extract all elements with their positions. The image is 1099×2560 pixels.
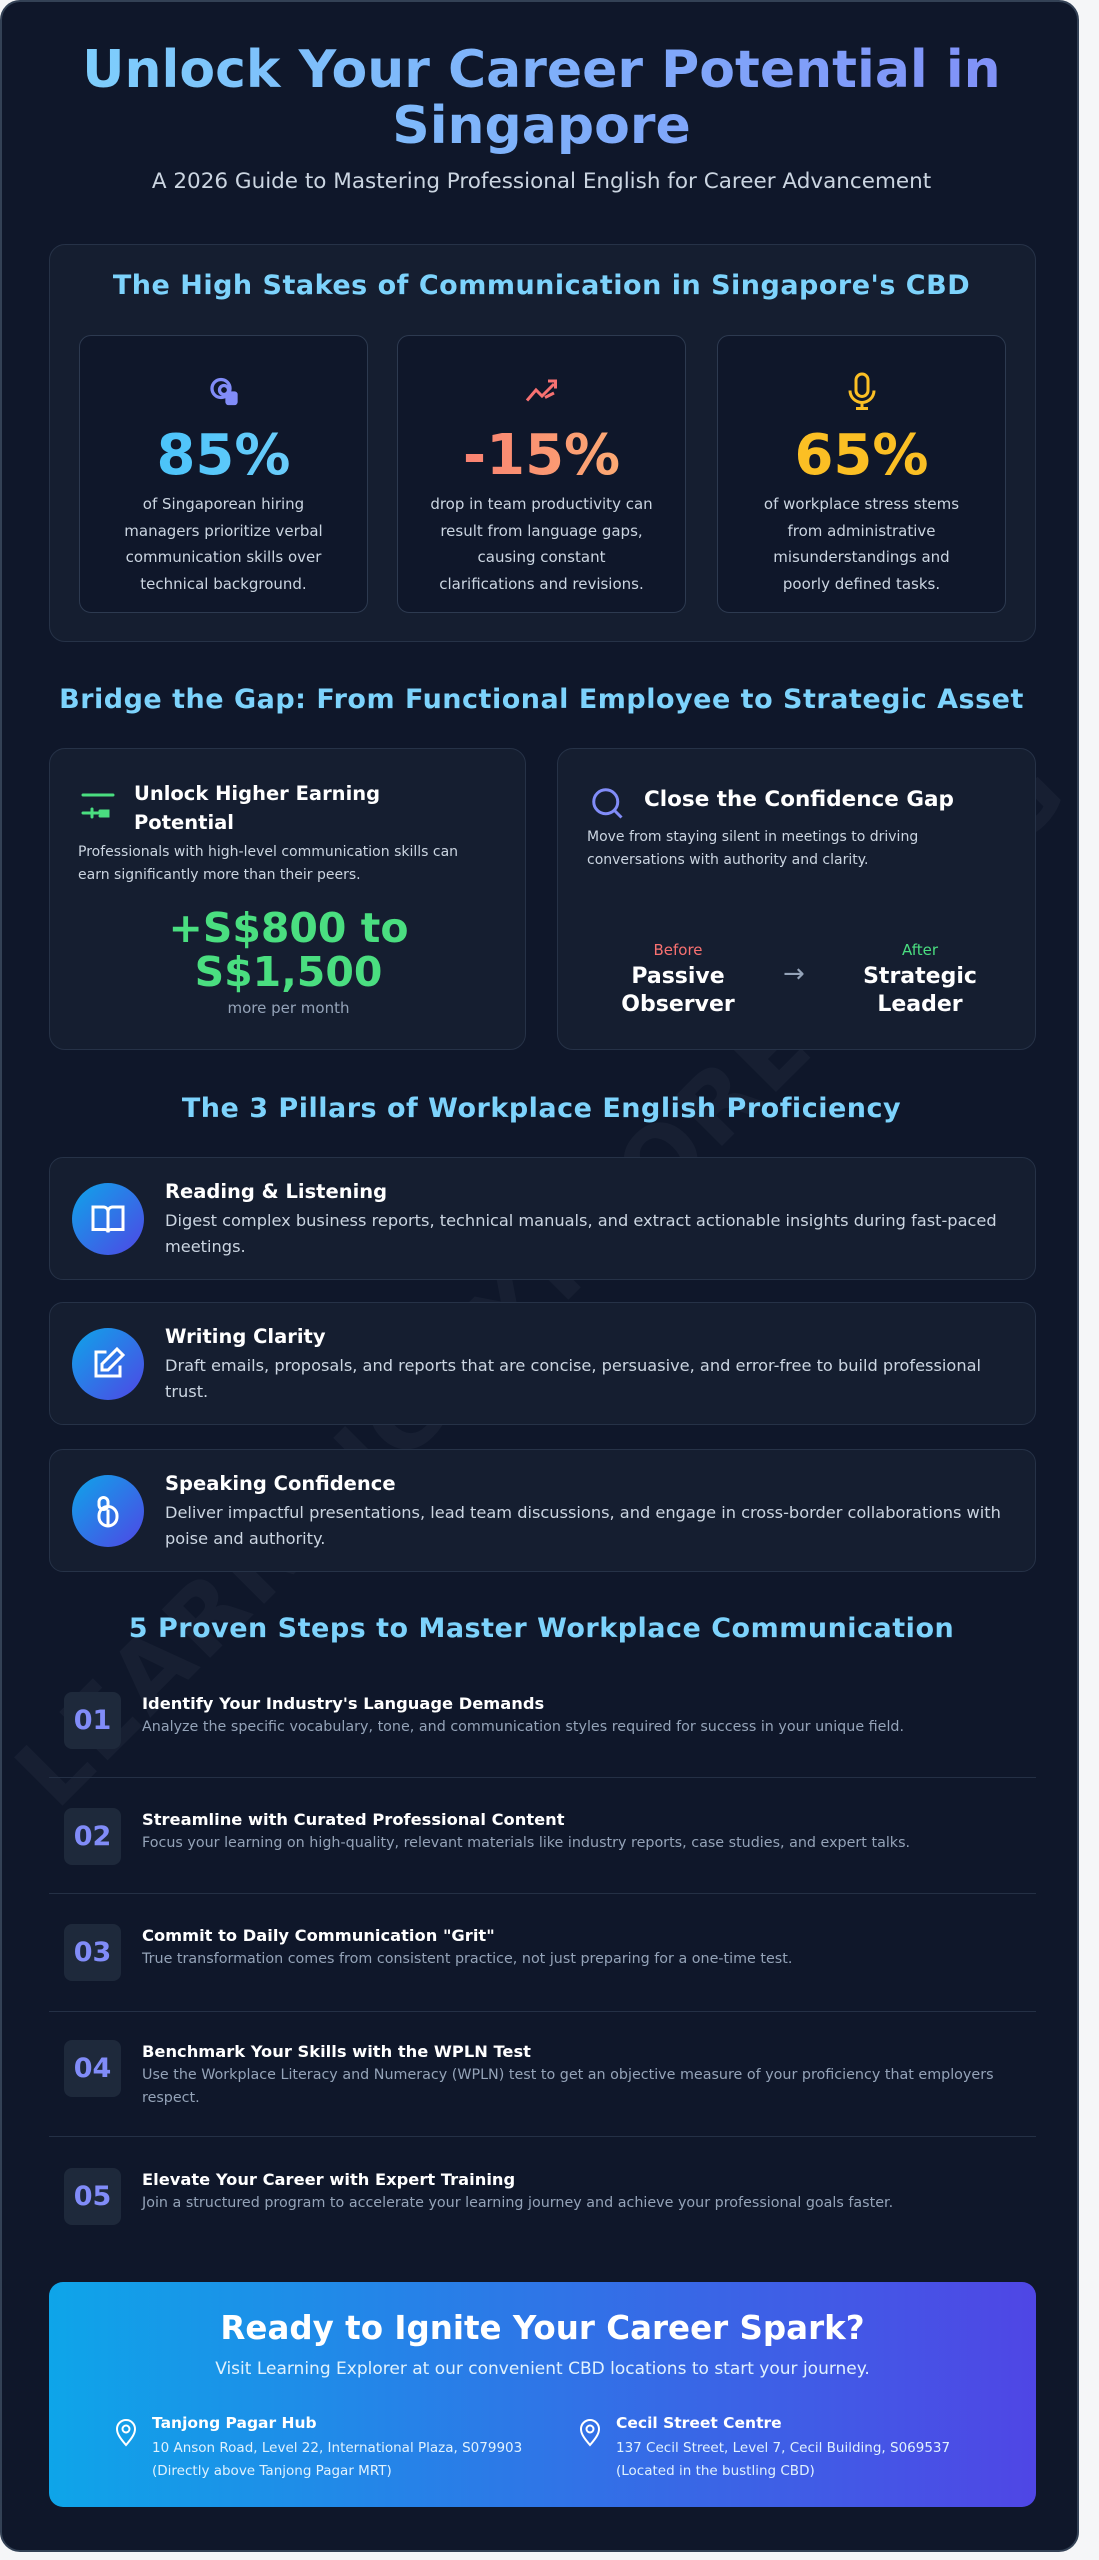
icon: trend bbox=[526, 380, 557, 402]
before: Passive bbox=[631, 964, 725, 989]
stat card -15%: -15% bbox=[463, 423, 620, 488]
pillar: speaking: Speaking Confidence bbox=[165, 1472, 396, 1495]
title bbox=[2, 42, 1081, 154]
step 03: 03 bbox=[74, 1937, 111, 1968]
earning desc: Professionals with high-level communication skills can earn significantly more than their peers. bbox=[78, 844, 458, 883]
before bbox=[621, 941, 735, 1017]
pillar: writing: Draft emails, proposals, and reports that are concise, persuasive, and error-free to build professional trust. bbox=[165, 1356, 981, 1401]
heading: steps: 5 Proven Steps to Master Workplace Communication bbox=[129, 1613, 954, 1644]
panel: earning bbox=[49, 748, 526, 1050]
pillar: reading: Reading & Listening bbox=[165, 1180, 387, 1203]
title: Unlock Your Career Potential in bbox=[82, 40, 1001, 100]
step 01: Identify Your Industry's Language Demands bbox=[142, 1694, 544, 1713]
step 04: 04 bbox=[74, 2053, 111, 2084]
panel: high stakes bbox=[49, 244, 1036, 642]
stat card 65%: of workplace stress stems from administrative misunderstandings and poorly defined tasks. bbox=[764, 495, 959, 592]
step 05 bbox=[64, 2168, 893, 2225]
pillar: speaking bbox=[49, 1449, 1036, 1572]
stat card -15%: result from language gaps, bbox=[440, 522, 643, 540]
step 05: Join a structured program to accelerate your learning journey and achieve your professional goals faster. bbox=[142, 2195, 893, 2211]
earning figure: +S$800 to bbox=[168, 904, 409, 952]
after: Strategic bbox=[863, 964, 977, 989]
location: cecil street: (Located in the bustling CBD) bbox=[616, 2463, 815, 2479]
pillar: reading bbox=[49, 1157, 1036, 1280]
arrow: → bbox=[783, 959, 805, 989]
step 03: True transformation comes from consistent practice, not just preparing for a one-time test. bbox=[142, 1951, 792, 1967]
earning figure bbox=[168, 904, 409, 996]
earning title bbox=[134, 782, 380, 834]
stat card 65%: 65% bbox=[794, 423, 929, 488]
cta banner bbox=[49, 2282, 1036, 2507]
icon: money bbox=[82, 794, 114, 818]
step 02: Streamline with Curated Professional Content bbox=[142, 1810, 565, 1829]
pillar: writing: Writing Clarity bbox=[165, 1325, 326, 1348]
step 02: 02 bbox=[74, 1821, 111, 1852]
stat card 85%: 85% bbox=[156, 423, 291, 488]
icon: pen bbox=[72, 1328, 144, 1400]
earning title: Potential bbox=[134, 811, 234, 834]
subtitle: A 2026 Guide to Mastering Professional English for Career Advancement bbox=[152, 169, 931, 194]
pillar: reading: Digest complex business reports, technical manuals, and extract actionable insights during fast-paced meetings. bbox=[165, 1211, 997, 1256]
heading: pillars: The 3 Pillars of Workplace English Proficiency bbox=[182, 1093, 901, 1124]
before: Before bbox=[653, 941, 703, 959]
step 02: Focus your learning on high-quality, relevant materials like industry reports, case studies, and expert talks. bbox=[142, 1835, 910, 1851]
location: tanjong pagar bbox=[116, 2414, 522, 2479]
stat card 65% bbox=[717, 335, 1006, 613]
after: After bbox=[902, 941, 938, 959]
pillar: speaking: Deliver impactful presentations, lead team discussions, and engage in cross-border collaborations with poise and authority. bbox=[165, 1503, 1001, 1548]
after bbox=[863, 941, 977, 1017]
cta title: Ready to Ignite Your Career Spark? bbox=[220, 2309, 865, 2347]
pillar: writing bbox=[49, 1302, 1036, 1425]
location: cecil street: 137 Cecil Street, Level 7, Cecil Building, S069537 bbox=[616, 2440, 950, 2456]
icon: people bbox=[210, 378, 238, 406]
icon: book bbox=[72, 1183, 144, 1255]
confidence title: Close the Confidence Gap bbox=[644, 787, 954, 812]
panel: confidence bbox=[557, 748, 1036, 1050]
stat card 85%: of Singaporean hiring managers prioritize verbal communication skills over technical background. bbox=[124, 495, 323, 592]
stat card -15%: causing constant bbox=[478, 548, 605, 566]
step 02 bbox=[64, 1808, 910, 1865]
location: tanjong pagar: (Directly above Tanjong Pagar MRT) bbox=[152, 2463, 392, 2479]
earning figure: S$1,500 bbox=[195, 948, 382, 996]
location: cecil street: Cecil Street Centre bbox=[616, 2414, 782, 2432]
stat card -15%: clarifications and revisions. bbox=[439, 574, 644, 592]
title: Singapore bbox=[392, 96, 691, 156]
step 04 bbox=[64, 2040, 994, 2106]
icon: search bbox=[592, 788, 622, 818]
earning title: Unlock Higher Earning bbox=[134, 782, 380, 805]
stat card 85% bbox=[79, 335, 368, 613]
icon: microphone bbox=[848, 372, 876, 410]
location: tanjong pagar: 10 Anson Road, Level 22, International Plaza, S079903 bbox=[152, 2440, 522, 2456]
step 03: Commit to Daily Communication "Grit" bbox=[142, 1926, 495, 1945]
step 01: Analyze the specific vocabulary, tone, and communication styles required for success in your unique field. bbox=[142, 1719, 904, 1735]
stat card -15%: drop in team productivity can bbox=[430, 495, 653, 513]
heading: high stakes: The High Stakes of Communication in Singapore's CBD bbox=[113, 270, 970, 301]
cta subtitle: Visit Learning Explorer at our convenient CBD locations to start your journey. bbox=[215, 2359, 870, 2379]
heading: bridge the gap: Bridge the Gap: From Functional Employee to Strategic Asset bbox=[59, 684, 1024, 715]
step 05: Elevate Your Career with Expert Training bbox=[142, 2170, 515, 2189]
step 04: Benchmark Your Skills with the WPLN Test bbox=[142, 2042, 531, 2061]
confidence desc: Move from staying silent in meetings to driving conversations with authority and clarity. bbox=[587, 829, 918, 868]
step 04: Use the Workplace Literacy and Numeracy (WPLN) test to get an objective measure of your proficiency that employers respect. bbox=[142, 2067, 994, 2106]
watermark: LEARNINGEXPLORER.ORG bbox=[0, 735, 1079, 1828]
after: Leader bbox=[877, 992, 963, 1017]
location: tanjong pagar: Tanjong Pagar Hub bbox=[152, 2414, 317, 2432]
step 01 bbox=[64, 1692, 904, 1749]
stat card -15% bbox=[397, 335, 686, 613]
step 03 bbox=[64, 1924, 792, 1981]
step 01: 01 bbox=[74, 1705, 111, 1736]
before: Observer bbox=[621, 992, 735, 1017]
step 05: 05 bbox=[74, 2181, 111, 2212]
icon: hand bbox=[72, 1475, 144, 1547]
location: cecil street bbox=[580, 2414, 950, 2479]
per month: more per month bbox=[228, 999, 350, 1017]
